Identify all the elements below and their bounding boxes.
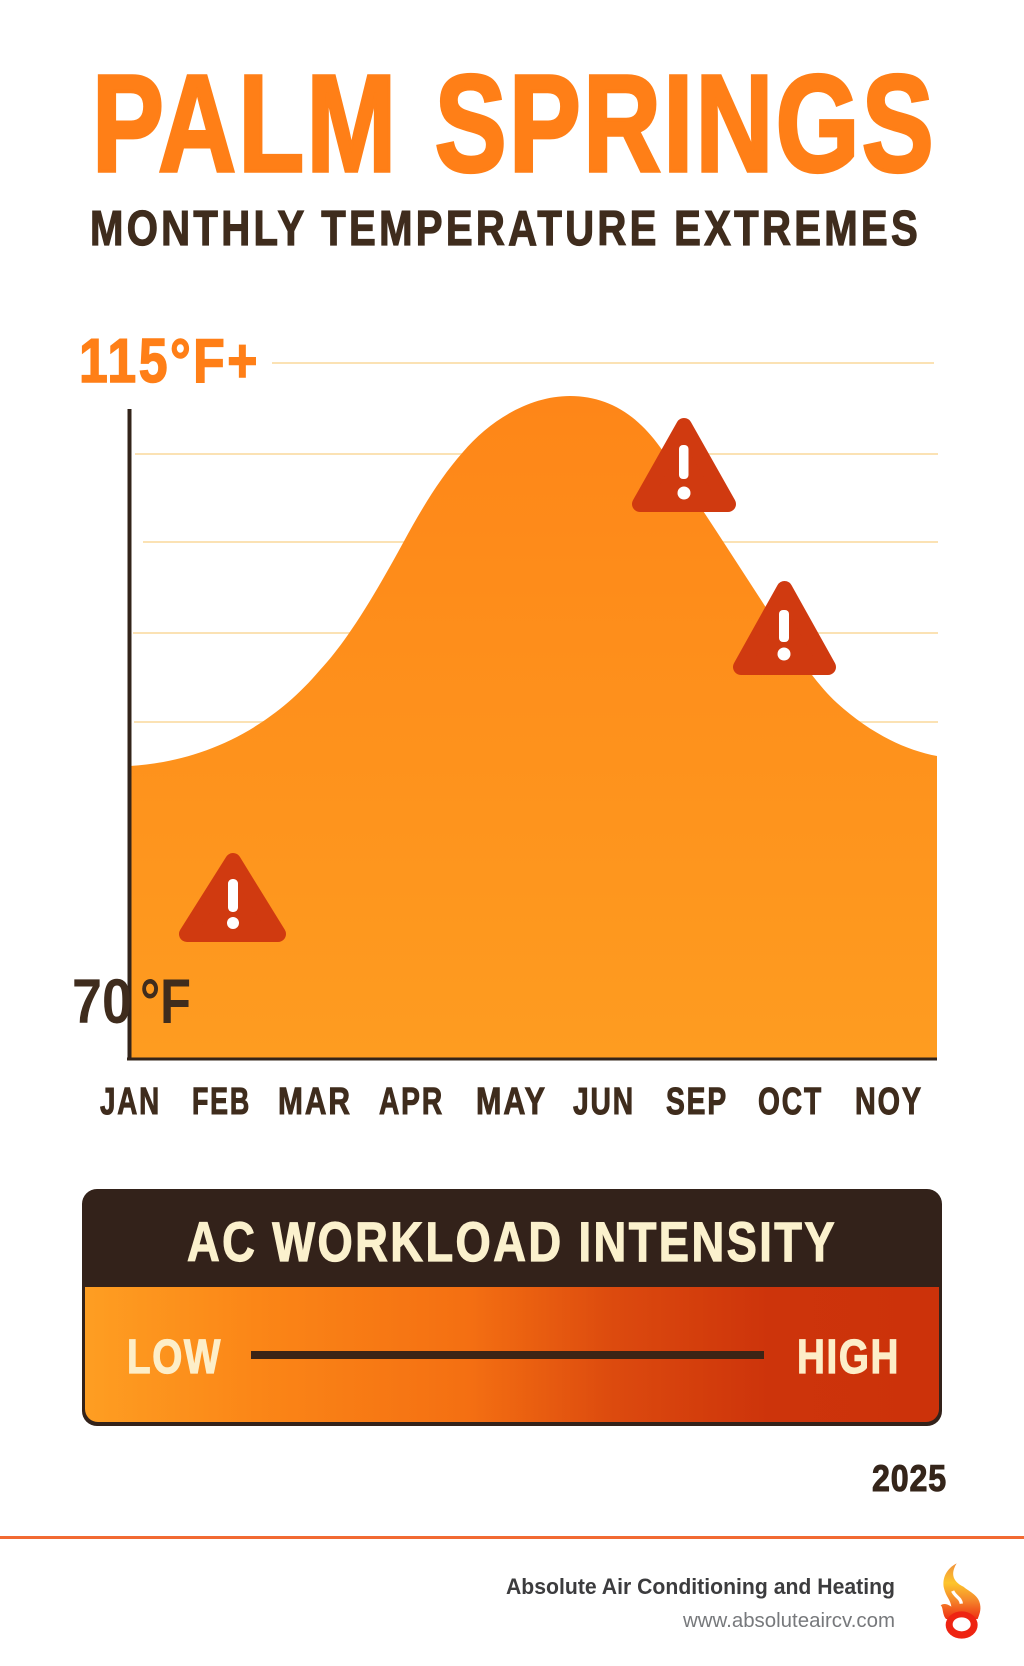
month labels: FEB	[192, 1081, 251, 1123]
warning icon: autumn	[741, 589, 828, 667]
panel frame	[82, 1189, 942, 1426]
footer rule	[0, 1536, 1024, 1539]
month labels	[100, 1081, 923, 1123]
company name: Absolute Air Conditioning and Heating	[506, 1574, 895, 1599]
intensity gradient	[85, 1287, 939, 1422]
scale bar	[251, 1351, 764, 1359]
icon: flame logo	[941, 1563, 980, 1639]
label: 70F low: °F	[140, 967, 191, 1037]
month labels: NOY	[855, 1081, 923, 1123]
warning icon: summer peak	[640, 426, 728, 504]
low label: LOW	[127, 1331, 222, 1384]
month labels: MAR	[278, 1081, 352, 1123]
grid lines	[133, 363, 938, 722]
month labels: APR	[379, 1081, 444, 1123]
x axis	[127, 1058, 937, 1060]
high label: HIGH	[797, 1331, 900, 1384]
panel heading: AC WORKLOAD INTENSITY	[187, 1210, 837, 1273]
label: 115F high: 115°F+	[79, 327, 260, 396]
website: www.absoluteaircv.com	[682, 1610, 895, 1632]
month labels: JAN	[100, 1081, 161, 1123]
area chart	[72, 327, 938, 1123]
panel: AC workload intensity	[82, 1189, 942, 1426]
label: 70F low: 70	[72, 967, 132, 1037]
y axis	[128, 409, 132, 1060]
temperature area	[130, 396, 937, 1059]
year: 2025	[872, 1458, 947, 1499]
month labels: MAY	[476, 1081, 547, 1123]
month labels: OCT	[758, 1081, 823, 1123]
label: 70F low	[72, 967, 191, 1037]
month labels: SEP	[666, 1081, 728, 1123]
month labels: JUN	[573, 1081, 635, 1123]
warning icon: winter	[187, 861, 278, 934]
